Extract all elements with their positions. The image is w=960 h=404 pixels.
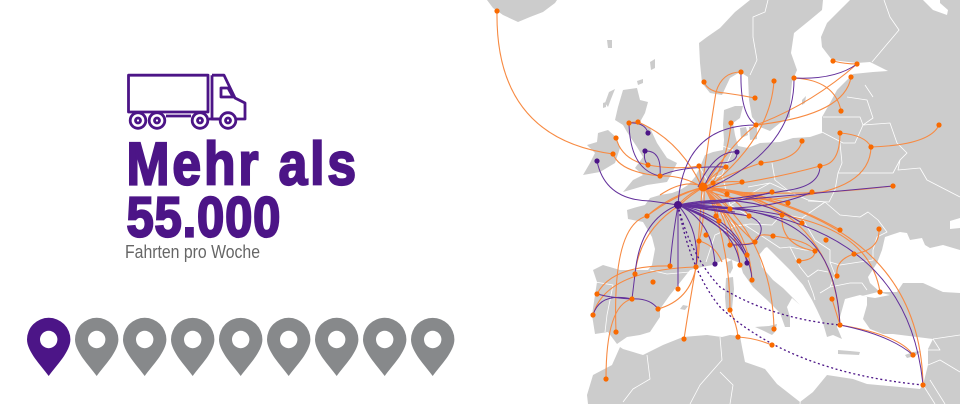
- heading: 55.000: 55.000: [126, 186, 280, 249]
- icon row: nine location pins: [27, 318, 454, 376]
- chart: purple destination dots: [594, 130, 750, 267]
- map: country borders: [595, 0, 960, 404]
- chart: purple routes: [593, 64, 923, 385]
- heading: Mehr als: Mehr als: [126, 130, 356, 197]
- map: land masses: [487, 0, 960, 404]
- icons: grey location pins: [75, 318, 454, 376]
- chart: orange routes: [497, 11, 939, 385]
- chart: orange destination dots: [494, 8, 942, 388]
- chart: dotted purple routes: [678, 205, 923, 385]
- icon: truck: [128, 75, 245, 128]
- text: Fahrten pro Woche: Fahrten pro Woche: [125, 241, 260, 262]
- map of Europe: [487, 0, 960, 404]
- map: inland seas: [862, 0, 960, 298]
- icon: purple location pin: [27, 318, 70, 376]
